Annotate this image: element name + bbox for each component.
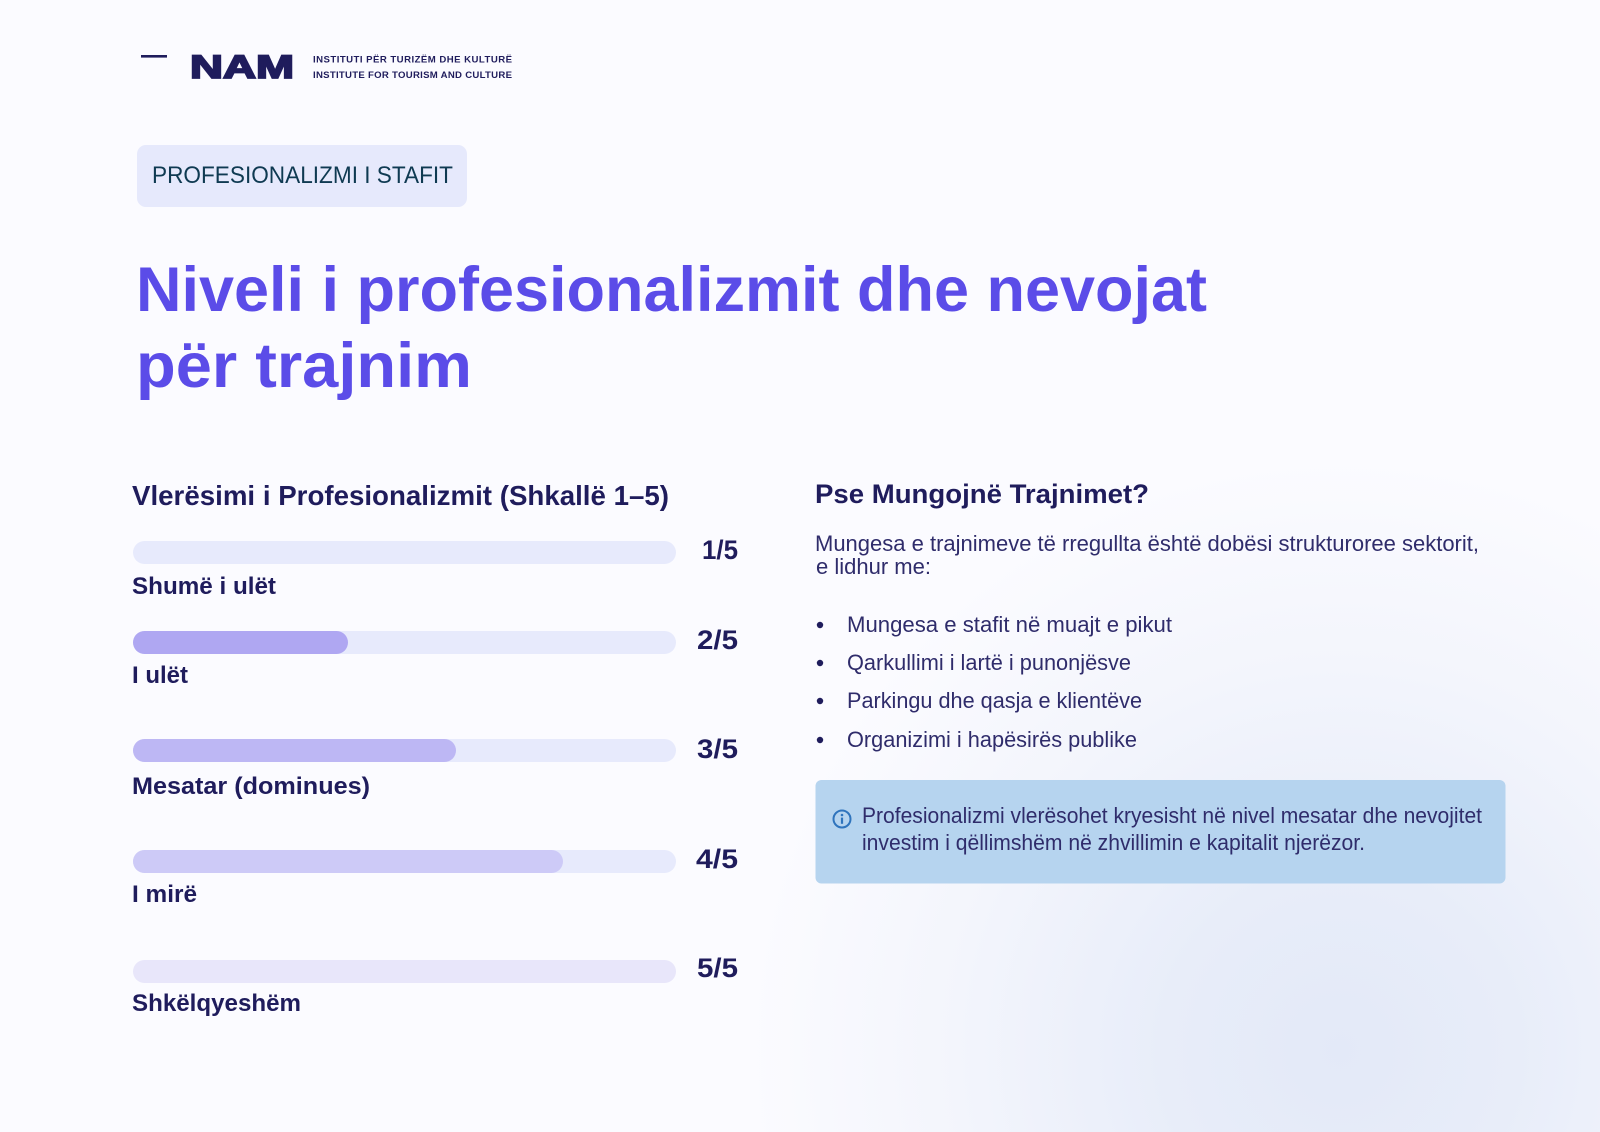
bullet list bbox=[817, 612, 1172, 752]
badge: section label: PROFESIONALIZMI I STAFIT bbox=[152, 162, 453, 189]
callout: key finding: Profesionalizmi vlerësohet kryesisht në nivel mesatar dhe nevojitet bbox=[862, 803, 1482, 828]
rating row: 3/5 bbox=[132, 734, 738, 800]
logo: NAM institute: NAM bbox=[190, 49, 294, 85]
rating row: 4/5: I mirë bbox=[132, 881, 197, 908]
intro paragraph: Mungesa e trajnimeve të rregullta është dobësi strukturoree sektorit, bbox=[815, 531, 1479, 556]
title: për trajnim bbox=[136, 331, 472, 401]
badge: section label bbox=[137, 145, 467, 207]
bullet list: Qarkullimi i lartë i punonjësve bbox=[847, 650, 1131, 675]
rating row: 3/5: 3/5 bbox=[697, 734, 738, 764]
panel: professionalism rating bbox=[132, 480, 738, 1017]
rating row: 5/5 bbox=[132, 953, 738, 1017]
rating row: 2/5: 2/5 bbox=[697, 625, 738, 655]
rating row: 1/5: 1/5 bbox=[702, 535, 738, 565]
title bbox=[136, 255, 1207, 401]
callout: key finding: investim i qëllimshëm në zhvillimin e kapitalit njerëzor. bbox=[862, 830, 1365, 855]
rating row: 5/5: Shkëlqyeshëm bbox=[132, 990, 301, 1017]
bullet list: Organizimi i hapësirës publike bbox=[847, 727, 1137, 752]
panel: why trainings are missing bbox=[815, 479, 1506, 884]
icon: info bbox=[834, 810, 850, 828]
logo: NAM institute bbox=[141, 49, 513, 85]
logo: NAM institute: INSTITUTI PËR TURIZËM DHE KULTURË bbox=[313, 54, 513, 66]
heading: why trainings are missing: Pse Mungojnë Trajnimet? bbox=[815, 479, 1149, 509]
rating row: 4/5: 4/5 bbox=[696, 844, 738, 874]
rating row: 1/5: Shumë i ulët bbox=[132, 573, 276, 600]
rating row: 2/5 bbox=[132, 625, 738, 689]
rating row: 2/5: I ulët bbox=[132, 662, 188, 689]
bullet list: Parkingu dhe qasja e klientëve bbox=[847, 688, 1142, 713]
bullet list: Mungesa e stafit në muajt e pikut bbox=[847, 612, 1172, 637]
intro paragraph: e lidhur me: bbox=[816, 554, 931, 579]
intro paragraph bbox=[815, 531, 1479, 579]
callout: key finding bbox=[816, 780, 1506, 884]
logo: NAM institute: INSTITUTE FOR TOURISM AND CULTURE bbox=[313, 70, 513, 81]
rating row: 3/5: Mesatar (dominues) bbox=[132, 773, 370, 800]
rating row: 5/5: 5/5 bbox=[697, 953, 738, 983]
rating row: 4/5 bbox=[132, 844, 738, 908]
rating row: 1/5 bbox=[132, 535, 738, 600]
title: Niveli i profesionalizmit dhe nevojat bbox=[136, 255, 1207, 325]
heading: rating scale: Vlerësimi i Profesionalizmit (Shkallë 1–5) bbox=[132, 480, 669, 511]
